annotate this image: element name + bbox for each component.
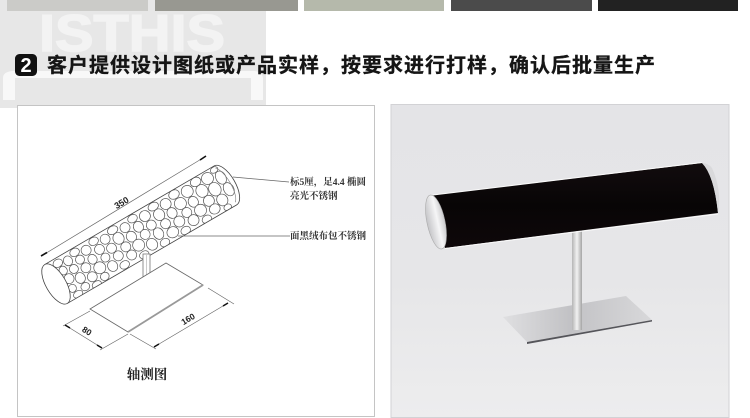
- drawing caption: 轴测图: [127, 367, 167, 382]
- cylinder end cap: [36, 260, 76, 308]
- dimension: length 350: [41, 156, 206, 256]
- leader lines: [178, 177, 290, 236]
- callout: fabric spec: 面黑绒布包不锈钢: [290, 230, 367, 242]
- dimension: width 80: 80: [80, 324, 94, 338]
- dimension: length 160: 160: [179, 311, 197, 327]
- drawing: stem: [143, 254, 150, 298]
- callout: end cap spec: 标5厘，足4.4 椭圆: [290, 176, 366, 188]
- panel: technical drawing: [18, 106, 374, 416]
- color swatches: [7, 0, 738, 11]
- watermark panel: ISTHIS: [39, 5, 225, 63]
- dimension: length 350: 350: [112, 195, 131, 211]
- panel: product photo: [391, 104, 729, 418]
- watermark panel: [0, 0, 266, 108]
- title: 客户提供设计图纸或产品实样，按要求进行打样，确认后批量生产: [47, 53, 656, 77]
- drawing: cylinder with stone pattern: [41, 164, 240, 304]
- photo: velvet bar: [433, 163, 718, 248]
- photo: stem: [572, 228, 582, 330]
- callout: end cap spec: 亮光不锈钢: [290, 190, 338, 202]
- dimension: length 160: [130, 288, 234, 349]
- step number badge: 2: [20, 55, 32, 77]
- photo: base plate: [503, 296, 652, 344]
- drawing: base plate: [90, 263, 203, 332]
- photo: right cap: [702, 163, 719, 213]
- photo: left metal cap: [421, 193, 451, 251]
- dimension: width 80: [63, 311, 128, 350]
- step number badge: [15, 54, 37, 77]
